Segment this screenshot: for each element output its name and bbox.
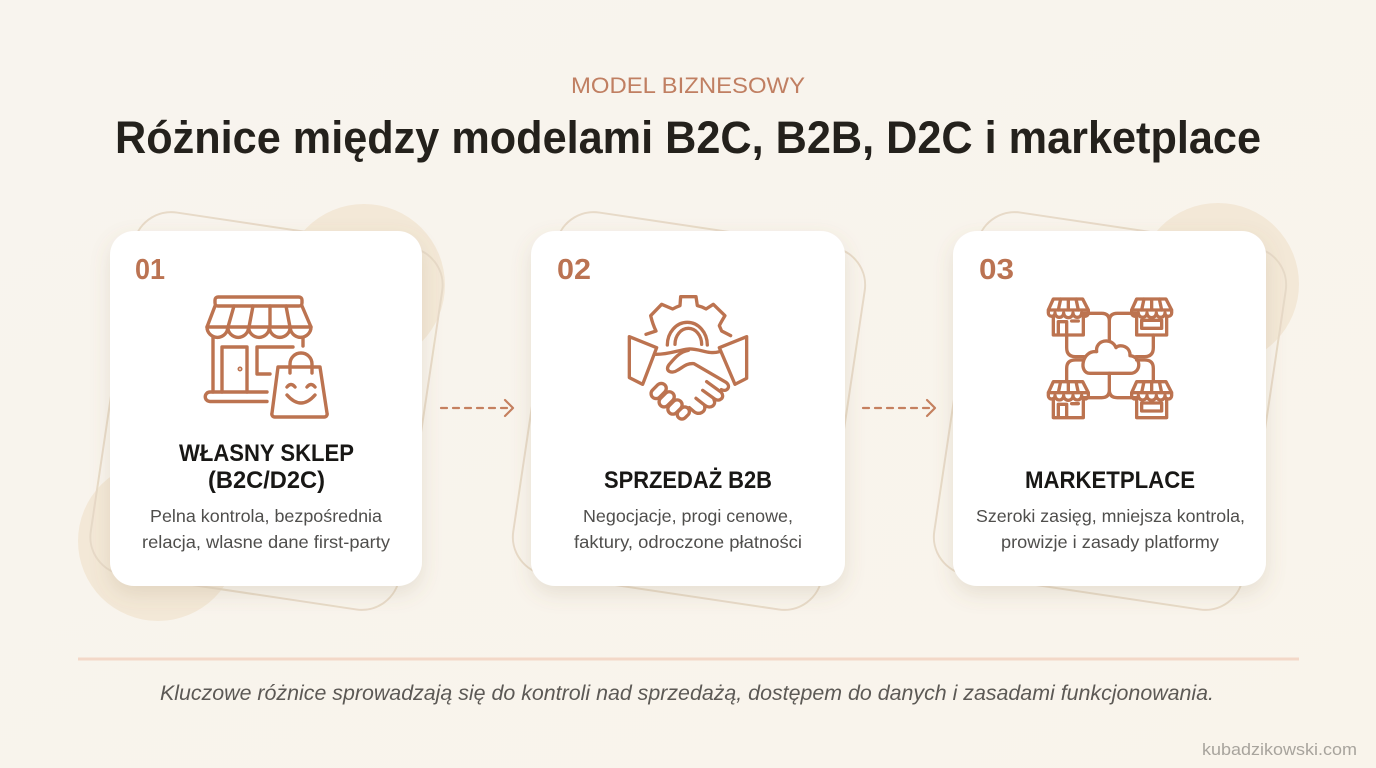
panel: card 3 marketplace [953, 231, 1266, 586]
arrow: card 1 to card 2 [441, 400, 513, 416]
decoration: shapes behind card 1 [78, 204, 448, 621]
number 03: 03 [979, 254, 1014, 286]
decoration: shapes behind card 2 [508, 207, 870, 615]
heading: WŁASNY SKLEP [179, 440, 354, 467]
eyebrow: model biznesowy: MODEL BIZNESOWY [571, 73, 805, 98]
icon: marketplace network with cloud [1048, 299, 1172, 418]
title: Różnice między modelami B2C, B2B, D2C i marketplace [115, 112, 1261, 163]
panel: card 1 własny sklep [110, 231, 422, 586]
description line 2: faktury, odroczone płatności [574, 532, 802, 552]
arrow: card 2 to card 3 [863, 400, 935, 416]
panel: card 2 sprzedaż b2b [531, 231, 845, 586]
description line 2: prowizje i zasady platformy [1001, 532, 1219, 552]
description: Negocjacje, progi cenowe, [583, 506, 793, 526]
number 01: 01 [135, 254, 165, 286]
watermark: kubadzikowski.com [1202, 740, 1357, 759]
description: Pelna kontrola, bezpośrednia [150, 506, 382, 526]
icon: handshake and gear [629, 297, 747, 421]
heading: SPRZEDAŻ B2B [604, 467, 772, 494]
number 02: 02 [557, 254, 591, 286]
heading line 2: (B2C/D2C) [208, 467, 325, 494]
icon: storefront with shopping bag [205, 297, 327, 417]
decoration: shapes behind card 3 [929, 203, 1299, 615]
heading: MARKETPLACE [1025, 467, 1195, 494]
description: Szeroki zasięg, mniejsza kontrola, [976, 506, 1245, 526]
summary text: Kluczowe różnice sprowadzają się do kontroli nad sprzedażą, dostępem do danych i zasadami funkcjonowania. [160, 682, 1214, 705]
description line 2: relacja, wlasne dane first-party [142, 532, 390, 552]
